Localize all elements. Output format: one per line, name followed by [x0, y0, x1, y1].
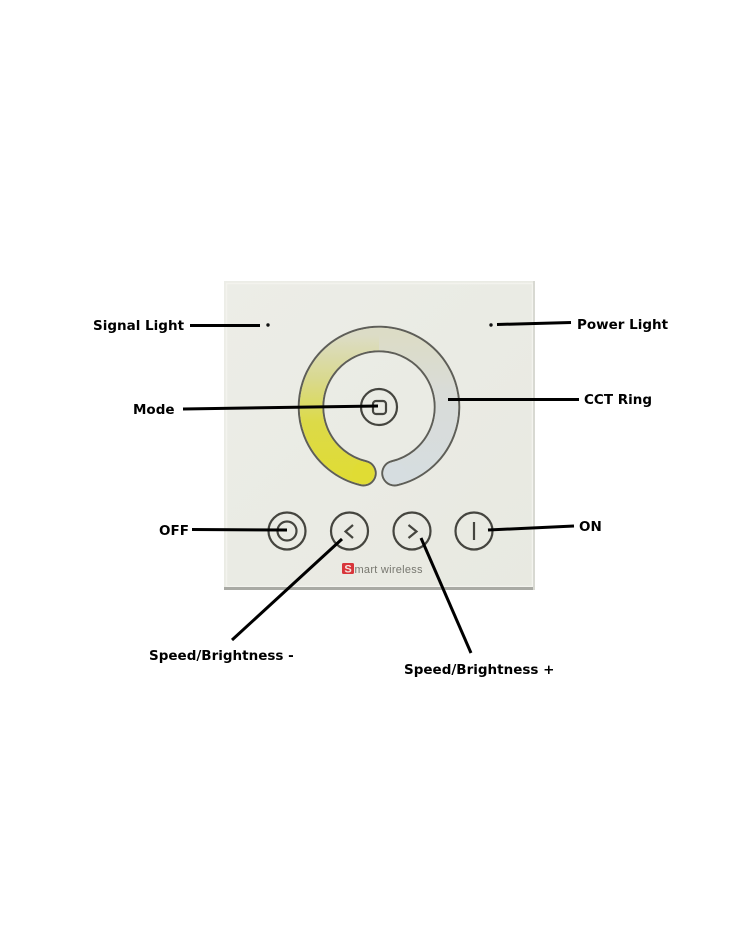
label: on [488, 519, 602, 535]
brand: smart wireless: mart wireless [354, 564, 423, 576]
label: power light: Power Light [577, 317, 669, 333]
label: off: OFF [159, 523, 189, 539]
label: on: ON [579, 519, 602, 535]
label: speed/brightness plus [404, 538, 554, 678]
label: cct ring: CCT Ring [584, 392, 652, 408]
label: speed/brightness minus [149, 539, 342, 664]
icon: left button [331, 512, 368, 550]
brand: smart wireless: S [344, 564, 352, 576]
label: speed/brightness minus: Speed/Brightness - [149, 648, 294, 664]
label: signal light: Signal Light [93, 318, 185, 334]
label: mode: Mode [133, 402, 175, 418]
icon: mode button [361, 389, 397, 425]
icon: off button [268, 512, 306, 550]
label: mode [133, 402, 378, 418]
icon: on button [456, 512, 492, 550]
CCT ring [311, 339, 447, 484]
label: off [159, 523, 287, 539]
label: speed/brightness plus: Speed/Brightness + [404, 662, 554, 678]
panel: wall switch [224, 281, 535, 590]
label: power light [489, 317, 669, 333]
icon: right button [394, 512, 430, 550]
label: signal light [93, 318, 270, 334]
